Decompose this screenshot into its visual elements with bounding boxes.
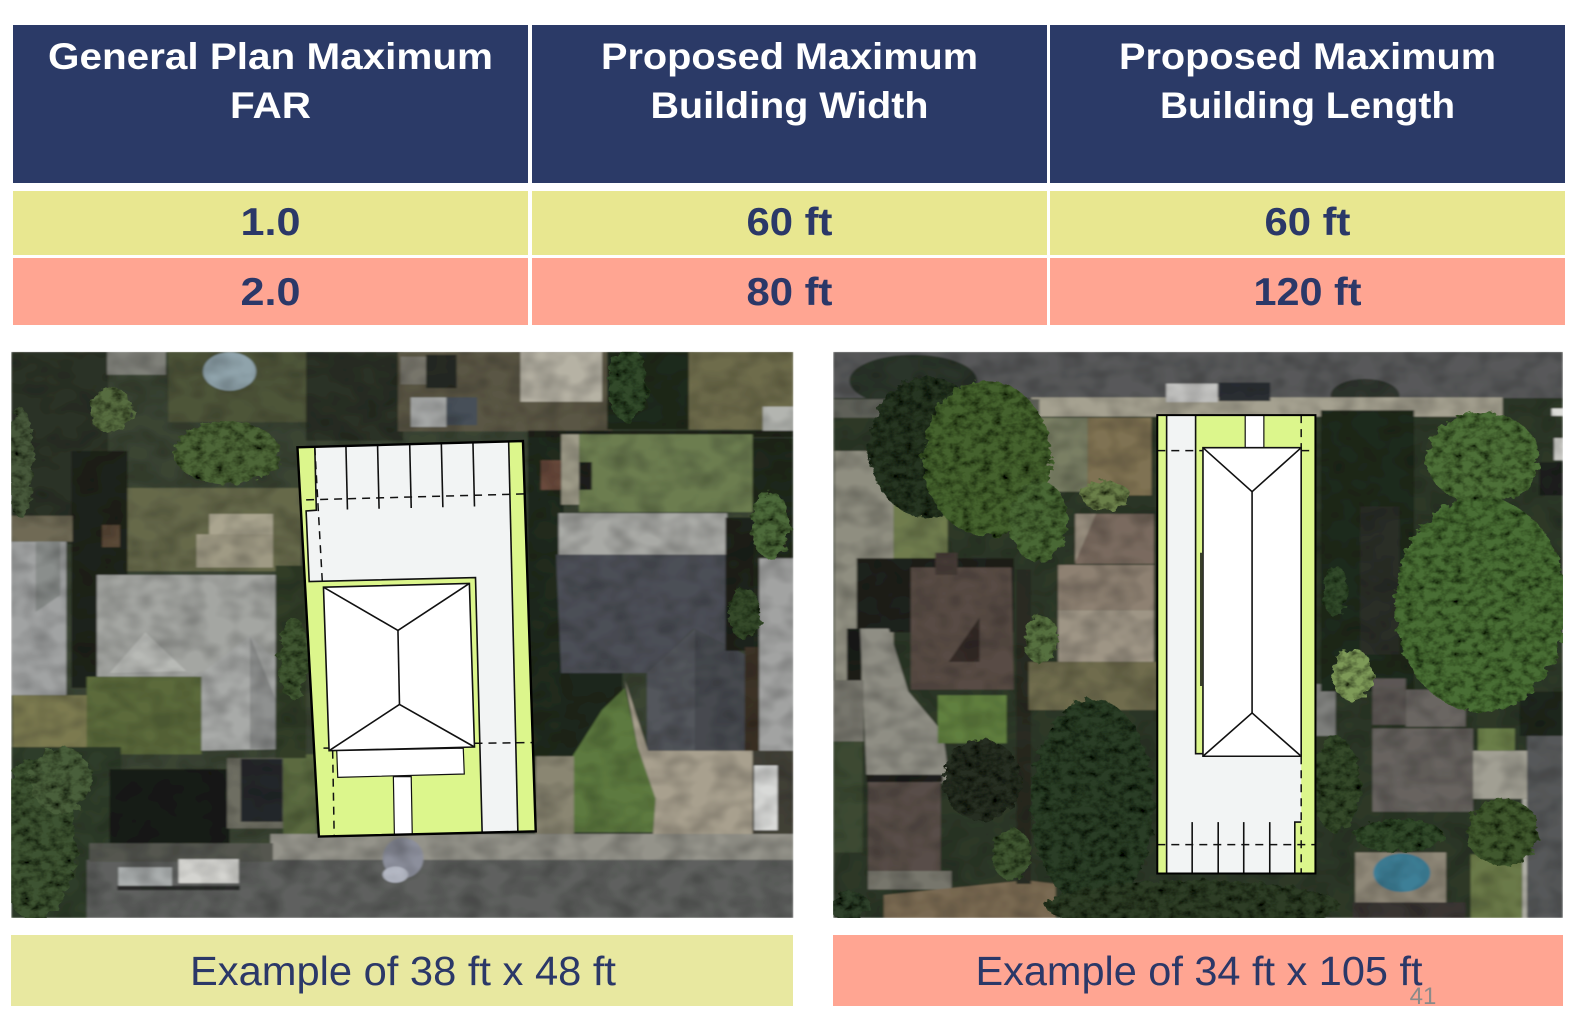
panel: right aerial example xyxy=(830,352,1566,932)
table header row xyxy=(13,25,1565,183)
table row: FAR 2.0: 120 ft xyxy=(1254,271,1362,314)
table header row: Proposed Maximum xyxy=(601,36,978,77)
table row: FAR 2.0: 2.0 xyxy=(240,271,300,314)
parking stall lines xyxy=(1192,822,1270,874)
caption: right example xyxy=(833,935,1563,1006)
front walkway xyxy=(393,777,412,835)
lot landscaping xyxy=(297,441,536,837)
aerial photo: left trees xyxy=(0,347,790,921)
setback dashed lines xyxy=(1157,415,1315,874)
aerial photo: right neighborhood xyxy=(833,352,1563,918)
lot boundary xyxy=(1157,415,1315,874)
table row: FAR 1.0: 1.0 xyxy=(240,201,300,244)
lot boundary xyxy=(297,441,536,837)
table header row: Proposed Maximum xyxy=(1119,36,1496,77)
front porch xyxy=(337,748,464,777)
table row: FAR 1.0: 60 ft xyxy=(746,201,832,244)
building roof plan xyxy=(323,583,474,751)
building roof plan xyxy=(1203,448,1301,756)
table header row: FAR xyxy=(230,85,311,126)
aerial texture overlay xyxy=(11,352,793,918)
site plan: right lot with 34 ft x 105 ft building xyxy=(1157,415,1315,874)
table header row: General Plan Maximum xyxy=(48,36,493,77)
lot landscaping xyxy=(1157,415,1315,874)
paved driveway and parking xyxy=(1167,415,1301,874)
table row: FAR 1.0 xyxy=(13,191,1565,255)
table xyxy=(13,25,1565,325)
front walkway xyxy=(1245,415,1264,448)
parking stall lines xyxy=(346,442,474,509)
aerial texture overlay xyxy=(833,352,1563,918)
caption: left example xyxy=(11,935,793,1006)
aerial photo: right trees xyxy=(830,377,1566,932)
aerial photo: left neighborhood xyxy=(11,352,793,918)
table header row: Building Width xyxy=(650,85,928,126)
table row: FAR 1.0: 60 ft xyxy=(1264,201,1350,244)
table header row: Building Length xyxy=(1160,85,1455,126)
caption: left example: Example of 38 ft x 48 ft xyxy=(190,948,617,994)
page number: 41 xyxy=(1410,983,1436,1010)
site plan: left lot with 38 ft x 48 ft building xyxy=(297,441,536,837)
panel: left aerial example xyxy=(0,347,793,921)
paved parking and driveway xyxy=(306,442,518,832)
table row: FAR 2.0 xyxy=(13,258,1565,325)
caption: right example: Example of 34 ft x 105 ft xyxy=(976,948,1423,994)
setback dashed lines xyxy=(306,447,533,836)
table row: FAR 2.0: 80 ft xyxy=(746,271,832,314)
